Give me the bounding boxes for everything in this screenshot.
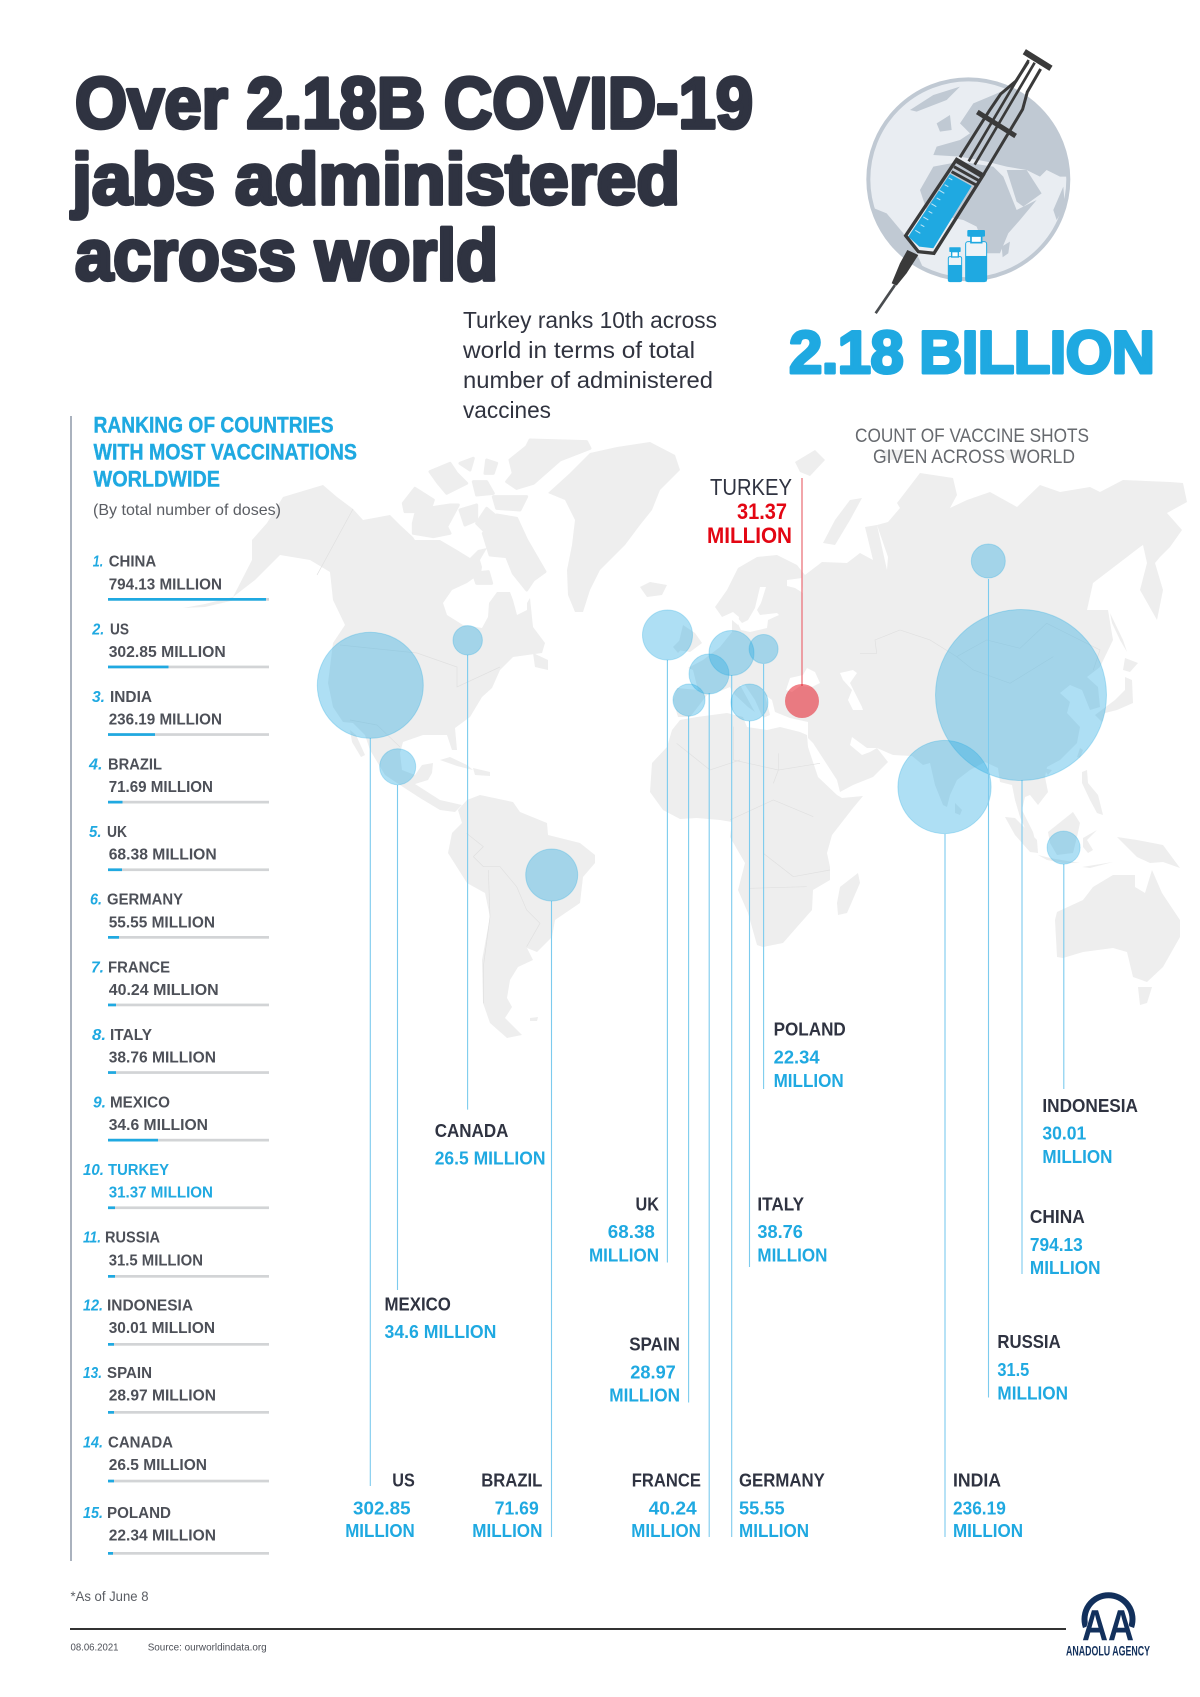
ranking heading: WORLDWIDE [94, 467, 220, 492]
row 10: Turkey: TURKEY [108, 1162, 169, 1179]
row 12: Indonesia: 30.01 MILLION [109, 1320, 215, 1337]
callout: US: US [392, 1469, 415, 1490]
callout: Turkey: 31.37 [737, 499, 787, 524]
callout: Italy [731, 684, 827, 1267]
row 11: Russia: RUSSIA [105, 1230, 160, 1247]
row 6: Germany: 55.55 MILLION [109, 914, 215, 931]
callout: India [898, 740, 1023, 1541]
Falkland Islands [530, 1017, 538, 1021]
callout: UK [589, 610, 692, 1265]
row 4: Brazil: BRAZIL [108, 756, 162, 774]
row 3: India [92, 689, 269, 736]
Greenland [548, 442, 680, 612]
footer rule [70, 1628, 1066, 1630]
callout: Russia [971, 544, 1068, 1403]
big number: 2.18 billion: 2.18 BILLION [789, 319, 1155, 386]
subtitle: Turkey ranks 10th: number of administered [463, 367, 713, 393]
row 10: Turkey [83, 1162, 269, 1209]
row 14: Canada [83, 1435, 269, 1482]
row 1: China: CHINA [109, 554, 157, 571]
callout: Indonesia [1042, 831, 1138, 1167]
callout: UK: UK [636, 1194, 660, 1215]
Africa [650, 713, 863, 947]
syringe barrel [906, 159, 983, 253]
row 2: US: US [110, 621, 129, 638]
ranking heading: RANKING OF COUNTRIES [94, 413, 334, 438]
callout: Spain: SPAIN [629, 1334, 680, 1355]
row 15: Poland [83, 1505, 269, 1555]
North America [233, 485, 545, 812]
row 3: India: INDIA [110, 689, 152, 706]
logo: Anadolu Agency [1066, 1595, 1150, 1659]
Tasmania [1138, 987, 1152, 1005]
title: jabs administered [70, 140, 680, 220]
row 8: Italy: ITALY [110, 1027, 152, 1044]
row 15: Poland: POLAND [107, 1505, 171, 1522]
row 1: China [93, 554, 269, 601]
syringe liquid [908, 174, 972, 248]
caption: count of vaccine shots: COUNT OF VACCINE SHOTS [855, 425, 1089, 447]
row 2: US [91, 621, 269, 668]
Arctic islands [403, 440, 590, 590]
row 5: UK: UK [107, 824, 127, 841]
callout: Canada: 26.5 MILLION [435, 1148, 546, 1169]
footer: date and source: 08.06.2021 [70, 1643, 119, 1654]
callout: Indonesia: MILLION [1042, 1146, 1112, 1167]
world map [183, 440, 1187, 1038]
row 11: Russia [83, 1230, 269, 1278]
footer: date and source: Source: ourworldindata.org [148, 1643, 267, 1654]
footnote: *As of June 8 [70, 1588, 149, 1604]
callout: US: MILLION [345, 1520, 415, 1541]
callout: Poland: MILLION [774, 1070, 844, 1091]
South America [448, 795, 595, 1038]
callout: Russia: 31.5 [997, 1359, 1029, 1380]
logo: Anadolu Agency: ANADOLU AGENCY [1066, 1643, 1150, 1659]
row 7: France: FRANCE [108, 959, 170, 976]
needle [892, 250, 918, 286]
callout: Poland: 22.34 [774, 1047, 820, 1068]
callout: Turkey [707, 474, 819, 718]
caption: count of vaccine shots [855, 425, 1089, 468]
Baja California [350, 730, 365, 757]
subtitle: Turkey ranks 10th: world in terms of total [462, 337, 695, 363]
row 13: Spain: 13. [83, 1365, 102, 1382]
title: across world [75, 216, 498, 296]
callout: Brazil: 71.69 [495, 1497, 539, 1518]
callout: Indonesia: INDONESIA [1042, 1095, 1138, 1116]
row 11: Russia: 11. [83, 1230, 101, 1247]
row 8: Italy: 8. [92, 1027, 106, 1044]
callout: France: MILLION [631, 1520, 701, 1541]
row 13: Spain: SPAIN [107, 1365, 152, 1382]
callout: Russia: MILLION [997, 1382, 1068, 1403]
row 4: Brazil [88, 756, 269, 804]
callout: Spain: 28.97 [630, 1362, 676, 1383]
subtitle: Turkey ranks 10th: vaccines [463, 397, 551, 423]
vials [948, 230, 987, 282]
row 14: Canada: 14. [83, 1435, 103, 1452]
callout: China [936, 610, 1106, 1278]
row 9: Mexico: 9. [93, 1094, 106, 1112]
callout: Brazil: BRAZIL [481, 1469, 542, 1490]
row 1: China: 1. [93, 554, 103, 571]
callout: Indonesia: 30.01 [1042, 1122, 1086, 1143]
callout: Germany: 55.55 [739, 1497, 785, 1518]
inland seas [735, 578, 877, 755]
row 12: Indonesia: 12. [83, 1297, 103, 1314]
row 15: Poland: 15. [83, 1505, 103, 1522]
Cuba and Hispaniola [440, 757, 473, 770]
callout: US [317, 632, 423, 1541]
callout: UK: 68.38 [608, 1221, 655, 1242]
row 12: Indonesia: INDONESIA [107, 1297, 193, 1314]
row 14: Canada: CANADA [108, 1435, 173, 1452]
row 5: UK: 5. [89, 824, 102, 841]
Madagascar [837, 873, 860, 915]
row 15: Poland: 22.34 MILLION [109, 1528, 216, 1545]
row 9: Mexico: 34.6 MILLION [109, 1117, 208, 1134]
callout: Canada [435, 626, 546, 1169]
row 8: Italy: 38.76 MILLION [109, 1050, 216, 1066]
logo: Anadolu Agency: AA [1082, 1601, 1134, 1650]
callout: Russia: RUSSIA [997, 1331, 1061, 1352]
callout: India: MILLION [953, 1520, 1023, 1541]
row 10: Turkey: 10. [83, 1162, 104, 1179]
callout: Germany [709, 630, 825, 1541]
row 13: Spain [83, 1365, 269, 1414]
callout: China: MILLION [1030, 1257, 1100, 1278]
row 14: Canada: 26.5 MILLION [109, 1457, 207, 1474]
row 5: UK: 68.38 MILLION [109, 847, 217, 864]
ranking heading [94, 413, 357, 492]
row 1: China: 794.13 MILLION [109, 576, 222, 593]
row 4: Brazil: 4. [88, 756, 102, 774]
callout: Poland: POLAND [774, 1019, 846, 1040]
Arctic archipelagos [795, 450, 825, 476]
footer: date and source [70, 1643, 267, 1654]
icon: globe with syringe and vials [868, 52, 1070, 313]
callout: Italy: 38.76 [757, 1221, 803, 1242]
title [70, 64, 753, 296]
caption: count of vaccine shots: GIVEN ACROSS WORLD [873, 446, 1075, 468]
callout: Turkey: MILLION [707, 523, 792, 548]
callout: France: FRANCE [632, 1469, 701, 1490]
callout: Mexico: 34.6 MILLION [384, 1321, 496, 1342]
callout: Spain [609, 684, 705, 1405]
callout: China: CHINA [1030, 1206, 1085, 1227]
panel: ranking of countries [71, 413, 357, 1561]
callout: Italy: MILLION [757, 1244, 827, 1265]
Aleutian and Alaska islands [183, 597, 235, 608]
row 13: Spain: 28.97 MILLION [109, 1388, 216, 1404]
row 7: France [91, 959, 269, 1006]
callout: China: 794.13 [1030, 1234, 1083, 1255]
callout: Mexico: MEXICO [384, 1294, 451, 1315]
row 3: India: 3. [92, 689, 105, 706]
callout: Mexico [380, 749, 496, 1342]
callout: Brazil: MILLION [472, 1520, 542, 1541]
callout: Spain: MILLION [609, 1384, 680, 1405]
row 6: Germany: GERMANY [107, 892, 183, 909]
callout: India: 236.19 [953, 1497, 1006, 1518]
Japan, Sakhalin, Taiwan, Hainan, Sri Lanka [1095, 677, 1133, 722]
row 11: Russia: 31.5 MILLION [109, 1252, 203, 1269]
callout: US: 302.85 [353, 1497, 411, 1518]
row 10: Turkey: 31.37 MILLION [109, 1185, 213, 1202]
row 2: US: 2. [91, 621, 104, 638]
row 7: France: 7. [91, 959, 104, 976]
Southeast Asian islands [1005, 817, 1038, 853]
callout: France [631, 654, 729, 1541]
callout: Germany: MILLION [739, 1520, 809, 1541]
callout: Poland [749, 634, 846, 1091]
Iceland [640, 582, 667, 597]
title: Over 2.18B COVID-19 [75, 64, 753, 144]
callout: UK: MILLION [589, 1244, 659, 1265]
row 6: Germany: 6. [90, 892, 102, 909]
callout: France: 40.24 [649, 1497, 697, 1518]
row 5: UK [89, 824, 269, 871]
Australia [1055, 870, 1180, 982]
Newfoundland [533, 653, 548, 670]
callout: India: INDIA [953, 1469, 1001, 1490]
ranking note: (By total number of doses) [93, 502, 281, 519]
row 9: Mexico [93, 1094, 269, 1142]
callout: Italy: ITALY [757, 1194, 805, 1215]
country borders [317, 509, 1100, 1003]
row 7: France: 40.24 MILLION [109, 982, 219, 999]
row 6: Germany [90, 892, 269, 939]
row 12: Indonesia [83, 1297, 269, 1346]
row 8: Italy [92, 1027, 269, 1074]
callout: Canada: CANADA [435, 1120, 508, 1141]
callout: Turkey: TURKEY [710, 474, 792, 500]
row 9: Mexico: MEXICO [110, 1094, 170, 1112]
callout: Brazil [472, 849, 578, 1541]
ranking heading: WITH MOST VACCINATIONS [94, 440, 357, 464]
subtitle: Turkey ranks 10th [462, 307, 717, 423]
callout: Germany: GERMANY [739, 1469, 825, 1490]
plunger [960, 52, 1051, 175]
Britain and Ireland [677, 625, 702, 652]
row 3: India: 236.19 MILLION [109, 712, 222, 728]
row 2: US: 302.85 MILLION [109, 644, 226, 661]
row 4: Brazil: 71.69 MILLION [109, 779, 213, 796]
subtitle: Turkey ranks 10th: Turkey ranks 10th across [463, 307, 717, 333]
Eurasia [673, 473, 1187, 840]
